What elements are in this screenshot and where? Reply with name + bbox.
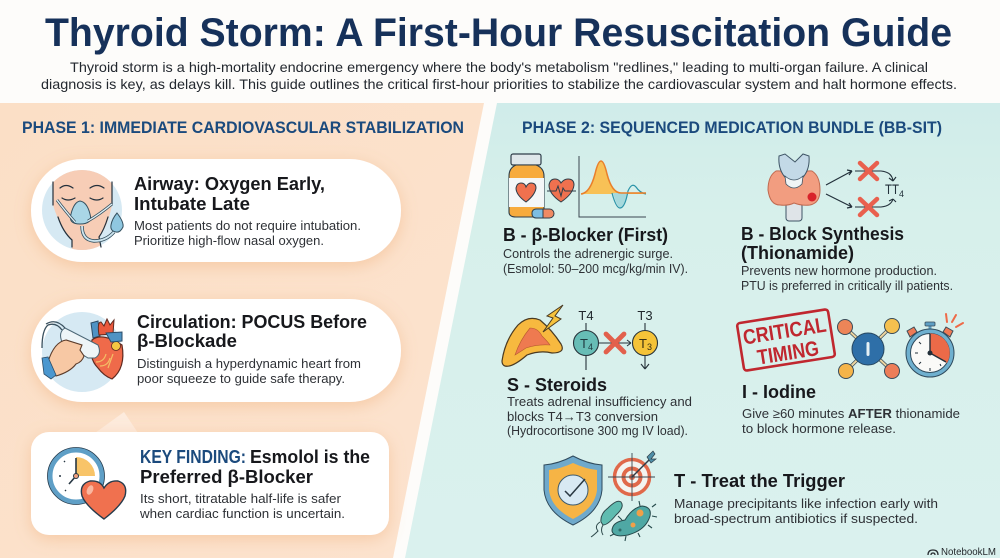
circulation heading: β-Blockade xyxy=(137,331,237,351)
trigger body: Manage precipitants like infection early with xyxy=(674,496,938,511)
block synthesis heading: (Thionamide) xyxy=(741,243,854,263)
key finding body: Its short, titratable half-life is safer xyxy=(140,491,342,506)
icon: thyroid gland and blocked arrows xyxy=(768,154,904,221)
beta blocker body xyxy=(503,246,688,276)
circulation body: Distinguish a hyperdynamic heart from xyxy=(137,356,361,371)
key finding callout background xyxy=(31,432,389,535)
panel: phase 1 background xyxy=(0,103,484,558)
card: circulation xyxy=(31,299,401,402)
icon: adrenal gland and T4 to T3 conversion: T4 xyxy=(578,308,594,323)
steroids body xyxy=(507,394,692,438)
circulation heading xyxy=(137,312,367,351)
trigger body: broad-spectrum antibiotics if suspected. xyxy=(674,511,918,526)
item: treat the trigger xyxy=(544,451,938,541)
icon: thyroid gland and blocked arrows: TT xyxy=(885,181,899,197)
key finding body: when cardiac function is uncertain. xyxy=(139,506,345,521)
stamp: critical timing xyxy=(737,309,835,372)
airway card background xyxy=(31,159,401,262)
key finding heading xyxy=(140,447,370,487)
key finding heading: Preferred β-Blocker xyxy=(140,467,313,487)
block synthesis body: PTU is preferred in critically ill patients. xyxy=(741,278,953,293)
icon: clock and heart xyxy=(48,448,126,519)
icon: oxygen mask xyxy=(42,170,124,250)
icon: shield, target and bacteria xyxy=(544,451,657,541)
key finding body xyxy=(139,491,345,521)
intro text: diagnosis is key, as delays kill. This guide outlines the critical first-hour priorities to stabilize the cardiovascular system and halt hormone effects. xyxy=(41,76,957,92)
trigger heading: T - Treat the Trigger xyxy=(674,471,845,491)
airway heading: Intubate Late xyxy=(134,194,250,214)
beta blocker heading: B - β-Blocker (First) xyxy=(503,225,668,245)
item: beta blocker xyxy=(503,154,688,276)
card: airway xyxy=(31,159,401,262)
item: steroids xyxy=(502,305,692,438)
iodine body xyxy=(742,406,960,436)
iodine body: Give ≥60 minutes AFTER thionamide xyxy=(742,406,960,421)
airway heading xyxy=(134,174,325,214)
key finding heading: Esmolol is the xyxy=(250,447,370,467)
airway heading: Airway: Oxygen Early, xyxy=(134,174,325,194)
block synthesis body xyxy=(741,263,953,293)
intro text xyxy=(41,59,957,92)
icon: adrenal gland and T4 to T3 conversion xyxy=(502,305,658,370)
panel: phase 2 background xyxy=(405,103,1000,558)
steroids body: (Hydrocortisone 300 mg IV load). xyxy=(507,423,688,438)
icon: ultrasound probe and heart xyxy=(42,312,123,392)
steroids heading: S - Steroids xyxy=(507,375,607,395)
phase 1 heading: PHASE 1: IMMEDIATE CARDIOVASCULAR STABILIZATION xyxy=(22,119,464,137)
circulation heading: Circulation: POCUS Before xyxy=(137,312,367,332)
iodine body: to block hormone release. xyxy=(742,421,896,436)
block synthesis heading: B - Block Synthesis xyxy=(741,224,904,244)
icon: adrenal gland and T4 to T3 conversion: T xyxy=(580,336,588,351)
beta blocker body: Controls the adrenergic surge. xyxy=(503,246,673,261)
trigger body xyxy=(674,496,938,526)
iodine heading: I - Iodine xyxy=(742,382,816,402)
callout pointer xyxy=(95,412,138,433)
beta blocker body: (Esmolol: 50–200 mcg/kg/min IV). xyxy=(503,261,688,276)
block synthesis body: Prevents new hormone production. xyxy=(741,263,937,278)
stamp: critical timing: TIMING xyxy=(756,337,821,370)
airway body: Most patients do not require intubation. xyxy=(134,218,361,233)
icon: thyroid gland and blocked arrows: 4 xyxy=(899,189,904,199)
icon: iodine molecule xyxy=(838,318,900,378)
phase 2 heading: PHASE 2: SEQUENCED MEDICATION BUNDLE (BB-SIT) xyxy=(522,119,942,137)
item: block synthesis xyxy=(741,154,953,293)
panel: phase 2 xyxy=(502,119,963,541)
block synthesis heading xyxy=(741,224,904,263)
icon: stopwatch xyxy=(906,314,963,377)
icon: pill bottle and graph xyxy=(509,154,646,218)
item: iodine xyxy=(737,309,963,436)
airway body xyxy=(134,218,361,248)
key finding heading: KEY FINDING: xyxy=(140,447,246,467)
title: Thyroid Storm: A First-Hour Resuscitation Guide xyxy=(45,11,952,55)
header xyxy=(41,11,957,92)
panel: phase 1 xyxy=(22,119,464,535)
intro text: Thyroid storm is a high-mortality endocrine emergency where the body's metabolism "redlines," leading to multi-organ failure. A clinical xyxy=(70,59,928,75)
steroids body: blocks T4→T3 conversion xyxy=(507,409,658,424)
circulation body: poor squeeze to guide safe therapy. xyxy=(137,371,345,386)
icon: adrenal gland and T4 to T3 conversion: 3 xyxy=(647,342,652,352)
airway body: Prioritize high-flow nasal oxygen. xyxy=(134,233,324,248)
icon: adrenal gland and T4 to T3 conversion: 4 xyxy=(588,342,593,352)
stamp: critical timing: CRITICAL xyxy=(741,314,828,350)
card: key finding xyxy=(31,412,389,535)
steroids body: Treats adrenal insufficiency and xyxy=(507,394,692,409)
icon: adrenal gland and T4 to T3 conversion: T3 xyxy=(637,308,653,323)
icon: adrenal gland and T4 to T3 conversion: T xyxy=(639,336,647,351)
NotebookLM watermark: NotebookLM xyxy=(941,546,996,558)
circulation card background xyxy=(31,299,401,402)
circulation body xyxy=(137,356,361,386)
